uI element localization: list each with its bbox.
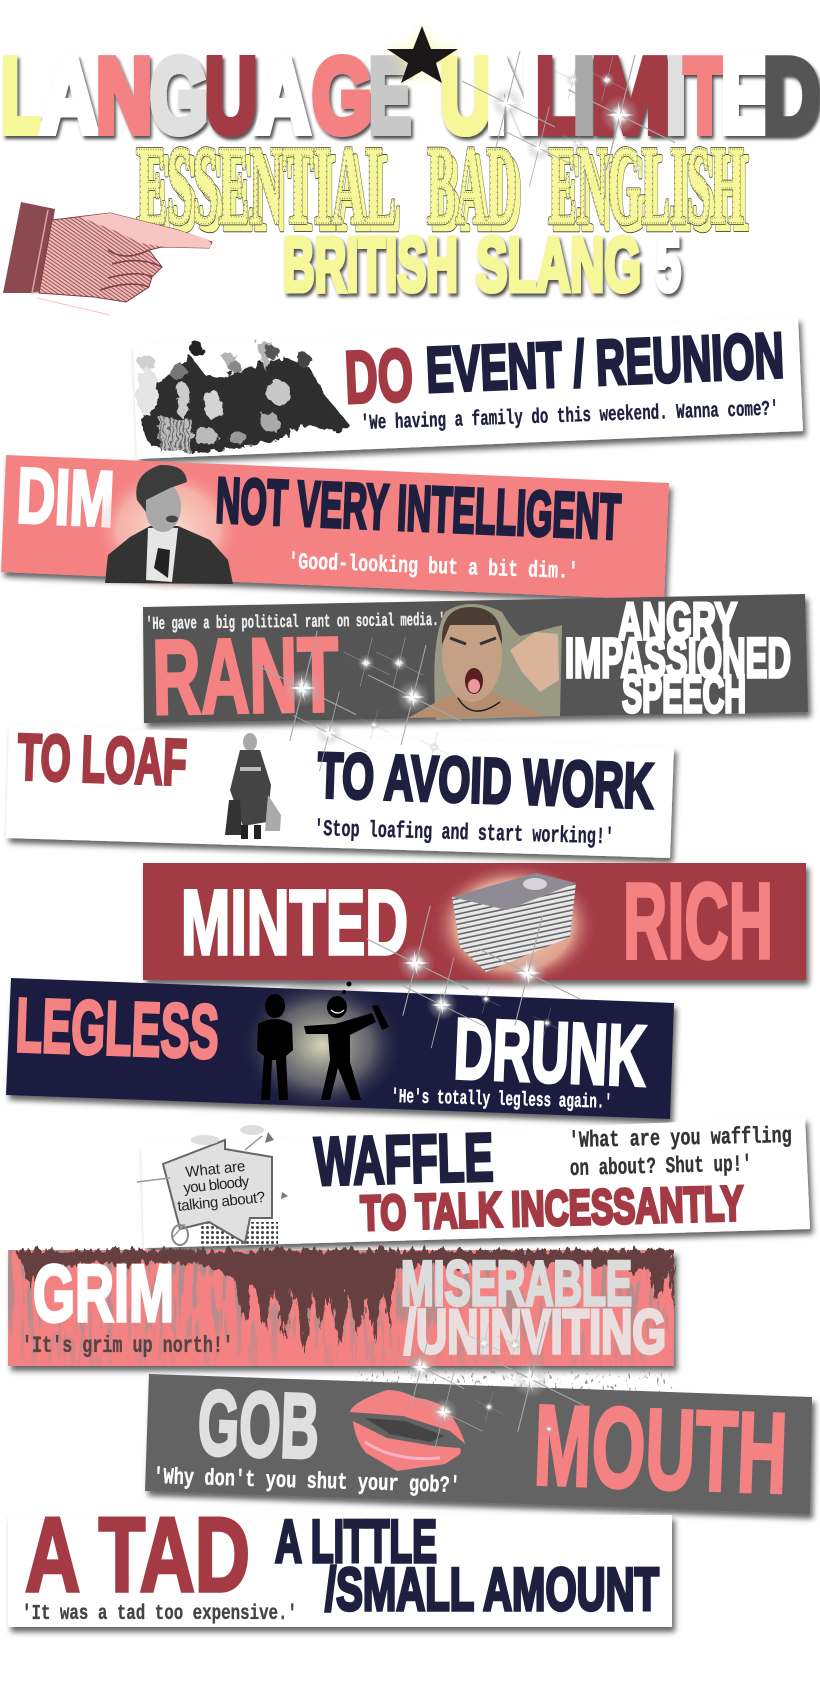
title: Language Unlimited [1,37,820,155]
subtitle: Essential Bad English: BAD [432,131,522,255]
icon: pointing hand [3,202,212,315]
quote: 'He gave a big political rant on social media.' [146,611,445,635]
title: Language Unlimited: G [312,37,372,155]
heading: miserable / uninviting [401,1249,666,1367]
heading: a little / small amount: A LITTLE [275,1508,437,1575]
title: Language Unlimited: U [205,37,257,155]
title: Language Unlimited: N [486,37,542,155]
heading: a little / small amount [275,1508,659,1623]
panel: waffle [137,1117,810,1248]
panel: gob [145,1372,812,1518]
icon: speech bubble [137,1125,288,1246]
quote [569,1123,792,1182]
photo: group in deck chairs [136,341,352,452]
title: Language Unlimited: A [40,37,98,155]
title: Language Unlimited: E [721,37,769,155]
icon: black star [387,26,458,83]
title: Language Unlimited: E [369,37,411,155]
photo: man in uniform cap [96,465,240,592]
heading: miserable / uninviting: MISERABLE [401,1249,632,1319]
heading: waffle: WAFFLE [313,1119,494,1200]
subtitle: Essential Bad English: BAD [427,124,517,248]
quote: 'It's grim up north!' [22,1333,233,1359]
quote: 'Good-looking but a bit dim.' [288,549,578,585]
quote: 'He's totally legless again.' [391,1086,612,1115]
title: Language Unlimited: I [666,37,686,155]
title: Language Unlimited: G [150,37,208,155]
panel: to loaf [6,720,674,858]
heading: gob: GOB [196,1372,321,1478]
subtitle: Essential Bad English: ESSENTIAL [136,124,396,248]
quote: 'Stop loafing and start working!' [314,816,614,850]
sparkles [254,51,675,1450]
subtitle: British Slang 5: SLANG [476,222,641,308]
icon: stack of banknotes [430,861,598,989]
heading: angry impassioned speech [565,593,791,724]
photo: old woman with bags [225,733,281,839]
heading: dim: DIM [15,451,116,543]
subtitle: Essential Bad English: BAD [432,131,522,255]
subtitle: Essential Bad English: ESSENTIAL [141,131,401,255]
title: Language Unlimited: L [1,37,41,155]
icon: speech bubble: talking about? [177,1189,266,1215]
icon: speech bubble: you bloody [183,1173,251,1197]
heading: angry impassioned speech: ANGRY [618,593,737,651]
heading: legless: LEGLESS [14,983,220,1075]
photo: shouting man [408,604,562,720]
subtitle: Essential Bad English: BAD [427,124,517,248]
title: Language Unlimited: M [591,37,670,155]
title: Language Unlimited: L [536,37,576,155]
title: Language Unlimited: U [440,37,492,155]
panel: minted [143,860,806,989]
title: Language Unlimited: A [255,37,310,155]
panel: grim [8,1249,674,1367]
panel: dim [1,451,669,600]
panel: do [133,317,803,459]
heading: rant: RANT [151,616,339,737]
heading: a little / small amount: /SMALL AMOUNT [325,1556,659,1623]
quote: 'Why don't you shut your gob?' [153,1464,460,1499]
heading: to loaf: TO LOAF [17,720,188,799]
quote: 'It was a tad too expensive.' [22,1603,297,1626]
panel: rant [143,593,808,737]
subtitle: Essential Bad English: ESSENTIAL [136,124,396,248]
heading: drunk: DRUNK [452,1001,648,1105]
heading: minted: MINTED [181,872,408,974]
heading: miserable / uninviting: /UNINVITING [404,1298,666,1367]
texture: rust drips [8,1250,674,1366]
icon: sober and drunk figures [240,977,404,1113]
subtitle: Essential Bad English: BAD [427,124,517,248]
subtitle: British Slang 5: 5 [656,222,681,308]
title: Language Unlimited: N [96,37,152,155]
panel: a tad [8,1496,672,1627]
title: Language Unlimited: T [684,37,725,155]
heading: do: DO [343,333,415,419]
heading: grim: GRIM [33,1249,174,1339]
icon: lips [350,1390,465,1471]
title: Language Unlimited: I [573,37,595,155]
subtitle: Essential Bad English: ESSENTIAL [141,131,401,255]
panel: legless [6,977,674,1119]
subtitle: British Slang 5: BRITISH [283,222,458,308]
icon: speech bubble: What are [185,1158,246,1181]
heading: a tad: A TAD [25,1496,250,1614]
subtitle: Essential Bad English: ESSENTIAL [136,124,396,248]
